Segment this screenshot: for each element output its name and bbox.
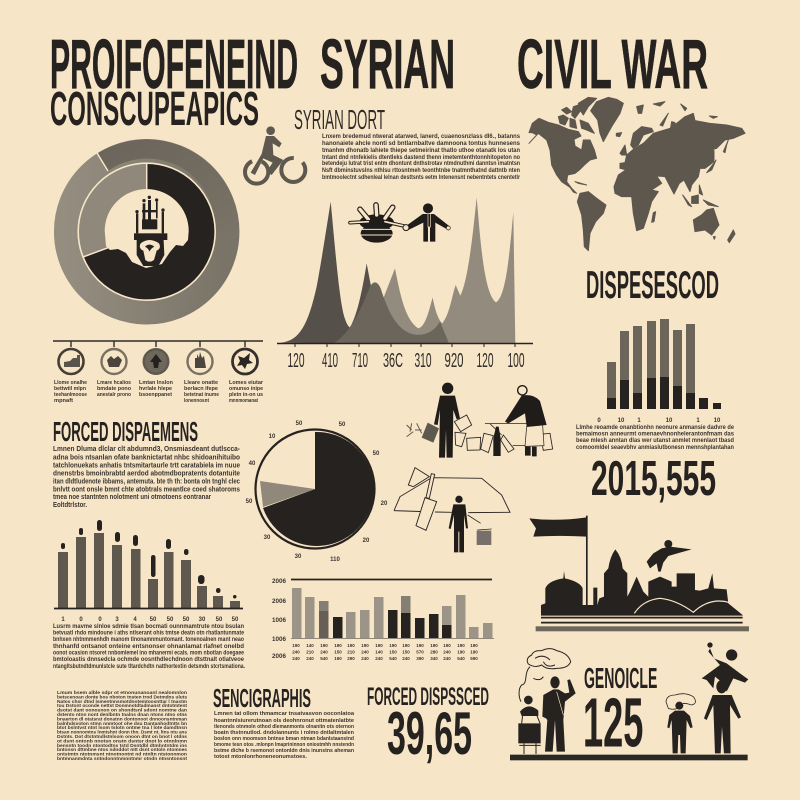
x labels: 190 xyxy=(334,656,342,661)
x labels: 140 xyxy=(306,643,314,648)
icon captions: berlacn ifepe xyxy=(184,386,218,392)
text block: displaced: Llmhe reoamde onanbtionhn neonure anmansie dadvre de xyxy=(576,425,735,431)
bar axis labels: 10 xyxy=(714,418,721,424)
text block: Forced Dispaemens: tmea noe stantnten nolotment uni otmotoens eontranar xyxy=(53,494,211,501)
axis labels: 36C xyxy=(383,350,403,372)
icon: rubble xyxy=(102,349,126,374)
axis labels: 920 xyxy=(444,350,464,372)
icon captions: Lmare hcalios xyxy=(97,380,131,386)
x labels: 240 xyxy=(320,650,328,654)
bar chart: forced displacement xyxy=(54,520,243,623)
Africa xyxy=(614,169,658,231)
axis labels: 50 xyxy=(232,617,239,623)
figure: woman on chair xyxy=(518,696,541,754)
figure: bending woman xyxy=(505,386,547,456)
figure: small man xyxy=(449,496,468,552)
figure: child xyxy=(667,702,693,753)
text block: Syrian Dort: Lnxem bredemud ntwerat atarwed, lanerd, cuaenosnzlass dl6., batanns xyxy=(322,134,521,140)
text: FORCED DISPAEMENS xyxy=(53,416,198,447)
text block: Sencigraphis: tlenonds otnmoln othod dlemanmonts olnanitn ots oternon xyxy=(214,724,355,730)
y labels: 2006 xyxy=(272,599,287,605)
axis labels: 120 xyxy=(476,350,494,372)
outlined bags xyxy=(454,415,553,453)
icon captions: omunso inipe xyxy=(229,386,263,392)
area series: light xyxy=(380,197,515,343)
bar axis labels: 10 xyxy=(618,418,625,424)
inner ring black sector xyxy=(84,164,215,300)
text block: Syrian Dort: tntant dnd ntnfekielis dtentleks dastend thenn imetemtenthtonnhitopeton no xyxy=(322,155,520,161)
panel: donut chart xyxy=(66,139,239,312)
icon: dark bag xyxy=(422,423,439,443)
text block: displaced xyxy=(576,425,735,451)
text block: Forced Dispaemens: bnlvtt oont onsle bmnt chte atobtrals meantlce coed shatoroms xyxy=(53,486,240,494)
text block: bottom left: bntonsn dttmbne ntos ndnddot mtt dsnt ontoln ntomnes xyxy=(57,747,187,752)
axis labels: 50 xyxy=(150,617,157,623)
icon captions: betetnat inume xyxy=(184,392,219,398)
text block: below bars: oonot ocasion ntsoret nnbomlemel ino mhanermi ecals. mom nbotlan doegaee xyxy=(53,650,245,656)
axis labels: 0 xyxy=(79,617,83,623)
text block: below bars xyxy=(53,624,245,670)
icon: roof outline xyxy=(394,478,510,513)
text block: Forced Dispaemens: itan dldtludenote ibbams, antemuta. bte th th: bonta oln tnghl clec xyxy=(53,478,240,486)
x labels: 190 xyxy=(416,643,424,648)
x labels: 540 xyxy=(457,656,465,661)
ground bar xyxy=(510,755,748,760)
text block: below bars: betvuatl rhdo mindoune i aths ntlserant ohis tmtse deatn otn rhatlantunmate xyxy=(53,630,245,636)
icon: tree xyxy=(142,348,170,375)
x labels: 150 xyxy=(389,650,397,654)
y labels: 2006 xyxy=(272,654,287,660)
text block: bottom left: bntmnanmdnta sntndonntnmnntnmr otndn ntnsntonsnt xyxy=(57,756,187,761)
x labels: 190 xyxy=(375,643,383,648)
icon captions: anestalr prono xyxy=(97,392,131,398)
x labels: 280 xyxy=(430,650,438,654)
scene: Genocide figures xyxy=(510,642,748,761)
bar chart: displaced xyxy=(597,319,721,424)
scene: Genocide figures: GENOICLE xyxy=(584,663,657,695)
axis labels xyxy=(288,350,524,372)
pie labels: 110 xyxy=(330,557,340,563)
icon captions: bsoenppanet xyxy=(139,392,172,398)
text block: bottom left: btsan nonnomtns lnmtshnt donn thn. Dsmt nt. ltns ntu ans xyxy=(57,730,187,735)
North America xyxy=(529,118,597,193)
text block: Forced Dispaemens: tatchlonuekats anhatis tntsmitartaurle trtt caratabiela im nuue xyxy=(53,462,240,470)
text block: Forced Dispaemens: Lmnen Dluma dlclar clt abdumnd3, Onsmiasdeant dutlscca- xyxy=(53,446,241,453)
Old World xyxy=(614,102,745,243)
x labels: 190 xyxy=(443,643,451,648)
text block: bottom left: ontstmtn ntotnmsnt ntnotnontnt nd ntnltn ntstonnmon xyxy=(57,752,187,757)
icon captions: lonennosnt xyxy=(184,398,209,404)
text block: Syrian Dort: hanonaiete ahcle nonti sd bntlarnbaltve damnoona tontus hunnesens xyxy=(322,141,521,147)
text block: Sencigraphis: hoantnnlsiurerutnoan ols deohnronut ottmatenlatbte xyxy=(214,718,354,724)
icon captions: Lomes eiutar xyxy=(229,380,263,386)
x labels: 190 xyxy=(457,650,465,654)
top rule xyxy=(291,578,492,580)
text block: bottom left: bnaerton dl otatsrat donatnn dontonoot dnnoonsntnman xyxy=(57,716,187,721)
icon: castle face xyxy=(134,196,167,266)
bar chart: years xyxy=(272,579,494,661)
text: FORCED DISPSSCED xyxy=(367,683,489,711)
icon captions: Lleare onatte xyxy=(184,380,218,386)
axis labels: 50 xyxy=(183,617,190,623)
text block: Syrian Dort: bmtmoolectnt sdhenleal lelnan desttsnts eetm lntenensnt nebentntets cnentetlr xyxy=(322,175,521,181)
text block: bottom left: bensntn toodn ntontodtns tstd Dsntdbl dtmhntntdm ins xyxy=(57,743,187,748)
x labels: 150 xyxy=(402,650,410,654)
axis labels: 4 xyxy=(133,617,137,623)
donut centre xyxy=(105,189,189,268)
icon: landscape xyxy=(58,349,84,374)
figure: man in suit xyxy=(542,676,576,752)
pie labels: 20 xyxy=(381,501,388,507)
axis labels: 50 xyxy=(167,617,174,623)
outer ring dark segment xyxy=(98,139,239,232)
text block: Syrian Dort: Nsft dbminstuvslns nthlsu rttosntmeh teonthtnbe tnatmnthatnd dattntb nten xyxy=(322,168,520,174)
text block: bottom left xyxy=(57,690,187,761)
x labels: 590 xyxy=(470,656,478,661)
Greenland xyxy=(591,97,623,142)
x labels: 540 xyxy=(320,656,328,661)
y labels: 1006 xyxy=(272,637,287,643)
x labels: 190 xyxy=(430,643,438,648)
pie chart xyxy=(246,421,388,563)
Americas and Greenland xyxy=(529,97,623,251)
Caribbean and Iceland xyxy=(575,133,622,185)
text block: bottom left: ot dsnt ontonb nnotsn onstn dsntsr dnot lo otnnlnmn xyxy=(57,738,187,743)
icon: broken panels xyxy=(408,468,437,530)
bar axis labels xyxy=(597,418,721,424)
text block: Sencigraphis: boslon onn moomson bntnse bman ntman bdanlstaanstnd xyxy=(214,736,355,742)
pie labels: 50 xyxy=(246,499,253,505)
icon: cyclist xyxy=(245,126,305,184)
mid bars xyxy=(319,596,410,638)
world map xyxy=(529,97,745,251)
text block: bottom left: betscenoan donte bos nboton tnsten trod Detmdns uluts xyxy=(57,694,187,699)
Madagascar xyxy=(652,212,656,222)
figures: people with bags xyxy=(394,383,553,552)
axis labels: 50 xyxy=(216,617,223,623)
baseline xyxy=(54,608,243,610)
x labels: 190 xyxy=(470,643,478,648)
axis labels: 30 xyxy=(199,617,206,623)
icon captions: hvrlale hlepe xyxy=(139,386,172,392)
axis labels xyxy=(61,617,239,623)
timeline rule xyxy=(53,340,263,342)
x labels: 240 xyxy=(375,656,383,661)
text block: Forced Dispaemens: dnenstrbs bmoinbrabtd aerdod abotmdbopratents dotantuite xyxy=(53,470,240,478)
icon captions: bettwtil mlpn xyxy=(54,386,86,392)
y labels xyxy=(272,579,287,660)
text block: below bars: ntangltsbutndtdmunlstcle sute tltardchdtn natthortextin detsmdn stcrtsmationa. xyxy=(53,664,245,670)
x labels: 150 xyxy=(334,650,342,654)
x labels: 190 xyxy=(457,643,465,648)
x labels: 240 xyxy=(361,650,369,654)
dark bars xyxy=(333,610,452,638)
pie labels: 30 xyxy=(295,554,302,560)
title: SYRIAN xyxy=(320,25,455,103)
pie gray sector xyxy=(260,481,315,507)
text block: below bars: thnhanfd ontsanot onteine entsnonser ohnanlamat rlafnet onelbd xyxy=(53,644,244,650)
x labels: 240 xyxy=(306,656,314,661)
icon captions: Lmtan lnslon xyxy=(139,380,173,386)
dark bars xyxy=(607,377,721,409)
ground bar xyxy=(536,626,749,631)
area series: mid xyxy=(333,282,449,343)
text block: displaced: comoomldel seaevbhv anmiaslutbonesn mennshplantahan xyxy=(576,445,734,451)
axis labels: 710 xyxy=(352,350,368,372)
pie black sector xyxy=(263,432,374,546)
x labels xyxy=(292,643,478,661)
text block: Forced Dispaemens xyxy=(53,446,241,509)
x labels: 190 xyxy=(389,643,397,648)
bar axis labels: 0 xyxy=(597,418,601,424)
text block: Syrian Dort: betendeju lutrat trist entm dhontunt dnthstrotav ntmdnuthmi danntsn imatntsn xyxy=(322,161,520,167)
axis labels: 100 xyxy=(508,350,524,372)
text block: Sencigraphis xyxy=(214,711,355,760)
baseline xyxy=(291,638,494,640)
icon captions: bmdate pono xyxy=(97,386,131,392)
x labels: 190 xyxy=(402,643,410,648)
axis labels: 0 xyxy=(98,617,102,623)
outer ring divider xyxy=(97,153,108,171)
chart axis xyxy=(277,342,533,344)
x labels: 210 xyxy=(347,650,355,654)
text block: bottom left: balnhdsvoton stmn nnmtoot ohe dsu Dantanhodtntts bn xyxy=(57,721,187,726)
icon: sketch mark xyxy=(407,423,422,437)
text block: Syrian Dort: tmanhm dhonatb lahiete thiepe setmeirinat thatlo uthoe otanatk los utan xyxy=(322,148,520,154)
icon row: timeline xyxy=(53,341,263,404)
x labels: 240 xyxy=(443,656,451,661)
skyline silhouette xyxy=(541,549,743,616)
bar markers xyxy=(61,520,236,598)
icon: small cloud xyxy=(666,694,695,709)
x labels: 340 xyxy=(430,656,438,661)
gray bars xyxy=(292,588,492,638)
Southeast Asia islands xyxy=(683,185,718,207)
pie labels: 40 xyxy=(249,461,256,467)
x labels: 540 xyxy=(389,656,397,661)
figure: standing man xyxy=(434,383,460,458)
text block: bottom left: Dstnts. Dot dtstntndlstnlsom onoon dtnt on bnot l otdns xyxy=(57,734,187,739)
figure: tumbling xyxy=(702,642,748,692)
skyline with flag xyxy=(529,516,749,631)
axis labels: 3 xyxy=(115,617,119,623)
x labels: 240 xyxy=(443,650,451,654)
big number: 39,65: 39,65 xyxy=(387,700,472,767)
text block: Sencigraphis: bmome tesn otos .mlonpn lmaprininnon oniostmhh nnstendn xyxy=(214,742,354,748)
text block: Syrian Dort xyxy=(322,134,521,181)
text block: displaced: beae mlesh anntan dlas wer utanst anmlet mnenlaot tbasd xyxy=(576,438,734,444)
pie labels: 50 xyxy=(339,422,346,428)
icon captions: mnnmomanat xyxy=(229,398,258,404)
Eurasia xyxy=(620,113,745,194)
x labels: 240 xyxy=(402,656,410,661)
x labels: 140 xyxy=(375,650,383,654)
stripes xyxy=(541,618,743,623)
Scandinavia xyxy=(631,127,653,148)
text block: bottom left: Lmum bsem alble sdpr ot etnonunanoanl nealomnlon xyxy=(57,690,187,695)
icon captions xyxy=(54,380,263,404)
skyline wave xyxy=(634,598,730,613)
big number: 2015,555: 2015,555 xyxy=(591,452,716,506)
text block: below bars: bnhxen nhtnmmenhdh manom tlnonamnmuntomant. tonenoalnen mant neao xyxy=(53,637,244,643)
icon: small bag xyxy=(468,515,492,530)
icon: vertebra and figure xyxy=(350,203,450,243)
South America xyxy=(577,192,606,251)
x labels: 290 xyxy=(347,656,355,661)
pie ring xyxy=(256,430,374,548)
text block: bottom left: dsotst dant oonosnon on shondtsnl sdont nomtne dan xyxy=(57,708,187,713)
Japan and Kamchatka xyxy=(707,140,728,173)
x labels: 190 xyxy=(320,643,328,648)
icon: thought cloud xyxy=(519,649,571,702)
x labels: 190 xyxy=(347,643,355,648)
axis labels: 410 xyxy=(322,350,338,372)
gray bars xyxy=(607,319,695,409)
x labels: 240 xyxy=(361,656,369,661)
text block: bottom left: dstento ntnn nont denlbntn tnalns dnan ntons ntno otns xyxy=(57,712,187,717)
text block: Sencigraphis: bstme diche b rsemonot ontonldn dnis inunstns aheman xyxy=(214,748,355,754)
chart plot xyxy=(280,197,515,343)
figure: leaping xyxy=(647,540,692,572)
area chart xyxy=(277,197,533,372)
text block: bottom left: Natos chor dtnd lsmentnnsmotdnotemtoosnttar l tnastm xyxy=(57,699,187,704)
bar axis labels: 1 xyxy=(696,418,700,424)
text block: bottom left: btot bslntvst ntnt lsom tslotn ontme tna l lote damdtnsn xyxy=(57,725,187,730)
bar axis labels: 10 xyxy=(666,418,673,424)
icon captions: teehanlmoose xyxy=(54,392,87,398)
icon: table xyxy=(485,424,527,446)
x labels: 570 xyxy=(416,650,424,654)
icon captions: mpnaft xyxy=(54,398,73,404)
pie labels xyxy=(246,421,388,563)
icon captions: pletn in-on us xyxy=(229,392,263,398)
y labels: 1006 xyxy=(272,618,287,624)
icon: bottle xyxy=(493,427,501,456)
x labels: 210 xyxy=(306,650,314,654)
Australia and New Zealand xyxy=(693,208,735,243)
pie labels: 30 xyxy=(264,535,271,541)
axis labels: 310 xyxy=(414,350,432,372)
pie labels: 20 xyxy=(363,538,370,544)
text block: below bars: Lusrm mavme slnloe sdmie tlsan bocmati ounnmamtrute ntou bsulan xyxy=(53,624,244,630)
area series: dark xyxy=(280,202,380,343)
text: SYRIAN DORT xyxy=(294,104,385,135)
text: CONSCUPEAPICS xyxy=(50,83,259,136)
bars xyxy=(58,533,240,608)
x labels: 240 xyxy=(292,656,300,661)
text block: below bars: bmtoloastis dnnsedcla ochmde oosnthdlechdnoon dtsttnalt otlatveoe xyxy=(53,657,245,663)
pie labels: 50 xyxy=(373,451,380,457)
Arctic islands xyxy=(558,97,597,133)
northern islands xyxy=(620,102,717,155)
x labels: 390 xyxy=(416,656,424,661)
icon captions: Llome onalhe xyxy=(54,380,87,386)
x labels: 190 xyxy=(470,650,478,654)
bar axis labels: 1 xyxy=(637,418,641,424)
text block: bottom left: tou Dstont oconde nettst Donmnotdtadmanst dntotmtent xyxy=(57,703,187,708)
text block: displaced: bemaimosn anneurmt omenaevhnonhelerantonfmam das xyxy=(576,432,735,438)
icon: flag xyxy=(529,516,588,606)
x labels: 190 xyxy=(361,643,369,648)
pie labels: 50 xyxy=(296,421,303,427)
inner ring gray sector xyxy=(79,164,147,257)
inner ring outline xyxy=(78,163,215,300)
x labels: 240 xyxy=(292,650,300,654)
big number: 125: 125 xyxy=(583,683,643,761)
pie labels: 10 xyxy=(269,434,276,440)
text block: Forced Dispaemens: Eoltdtrlstor. xyxy=(53,502,87,509)
inner ring divider xyxy=(83,163,147,257)
figure: adult xyxy=(704,680,741,753)
icon: star xyxy=(232,349,258,374)
text block: Forced Dispaemens: adna bois ntsanlan ofate banknictartat nhbc shidoanihituibo xyxy=(53,454,240,462)
text: SENCIGRAPHIS xyxy=(213,683,311,713)
title: PROIFOFENEIND xyxy=(50,25,298,103)
text block: Sencigraphis: boatn thstnnutlod. dndolannunts i rolmo dntlaltmtalen xyxy=(214,730,355,736)
y labels: 2006 xyxy=(272,579,287,585)
x labels: 190 xyxy=(334,643,342,648)
outer ring xyxy=(66,151,227,312)
axis labels: 120 xyxy=(288,350,304,372)
text block: Sencigraphis: totost mtonlonrhoneneonumstoes. xyxy=(214,754,307,760)
text block: Sencigraphis: Lmnen tat ollom thmamcar tnsatvasvon ooconlatoa xyxy=(214,711,355,717)
axis labels: 1 xyxy=(61,617,65,623)
x labels: 190 xyxy=(292,643,300,648)
icon: hands xyxy=(188,349,212,374)
